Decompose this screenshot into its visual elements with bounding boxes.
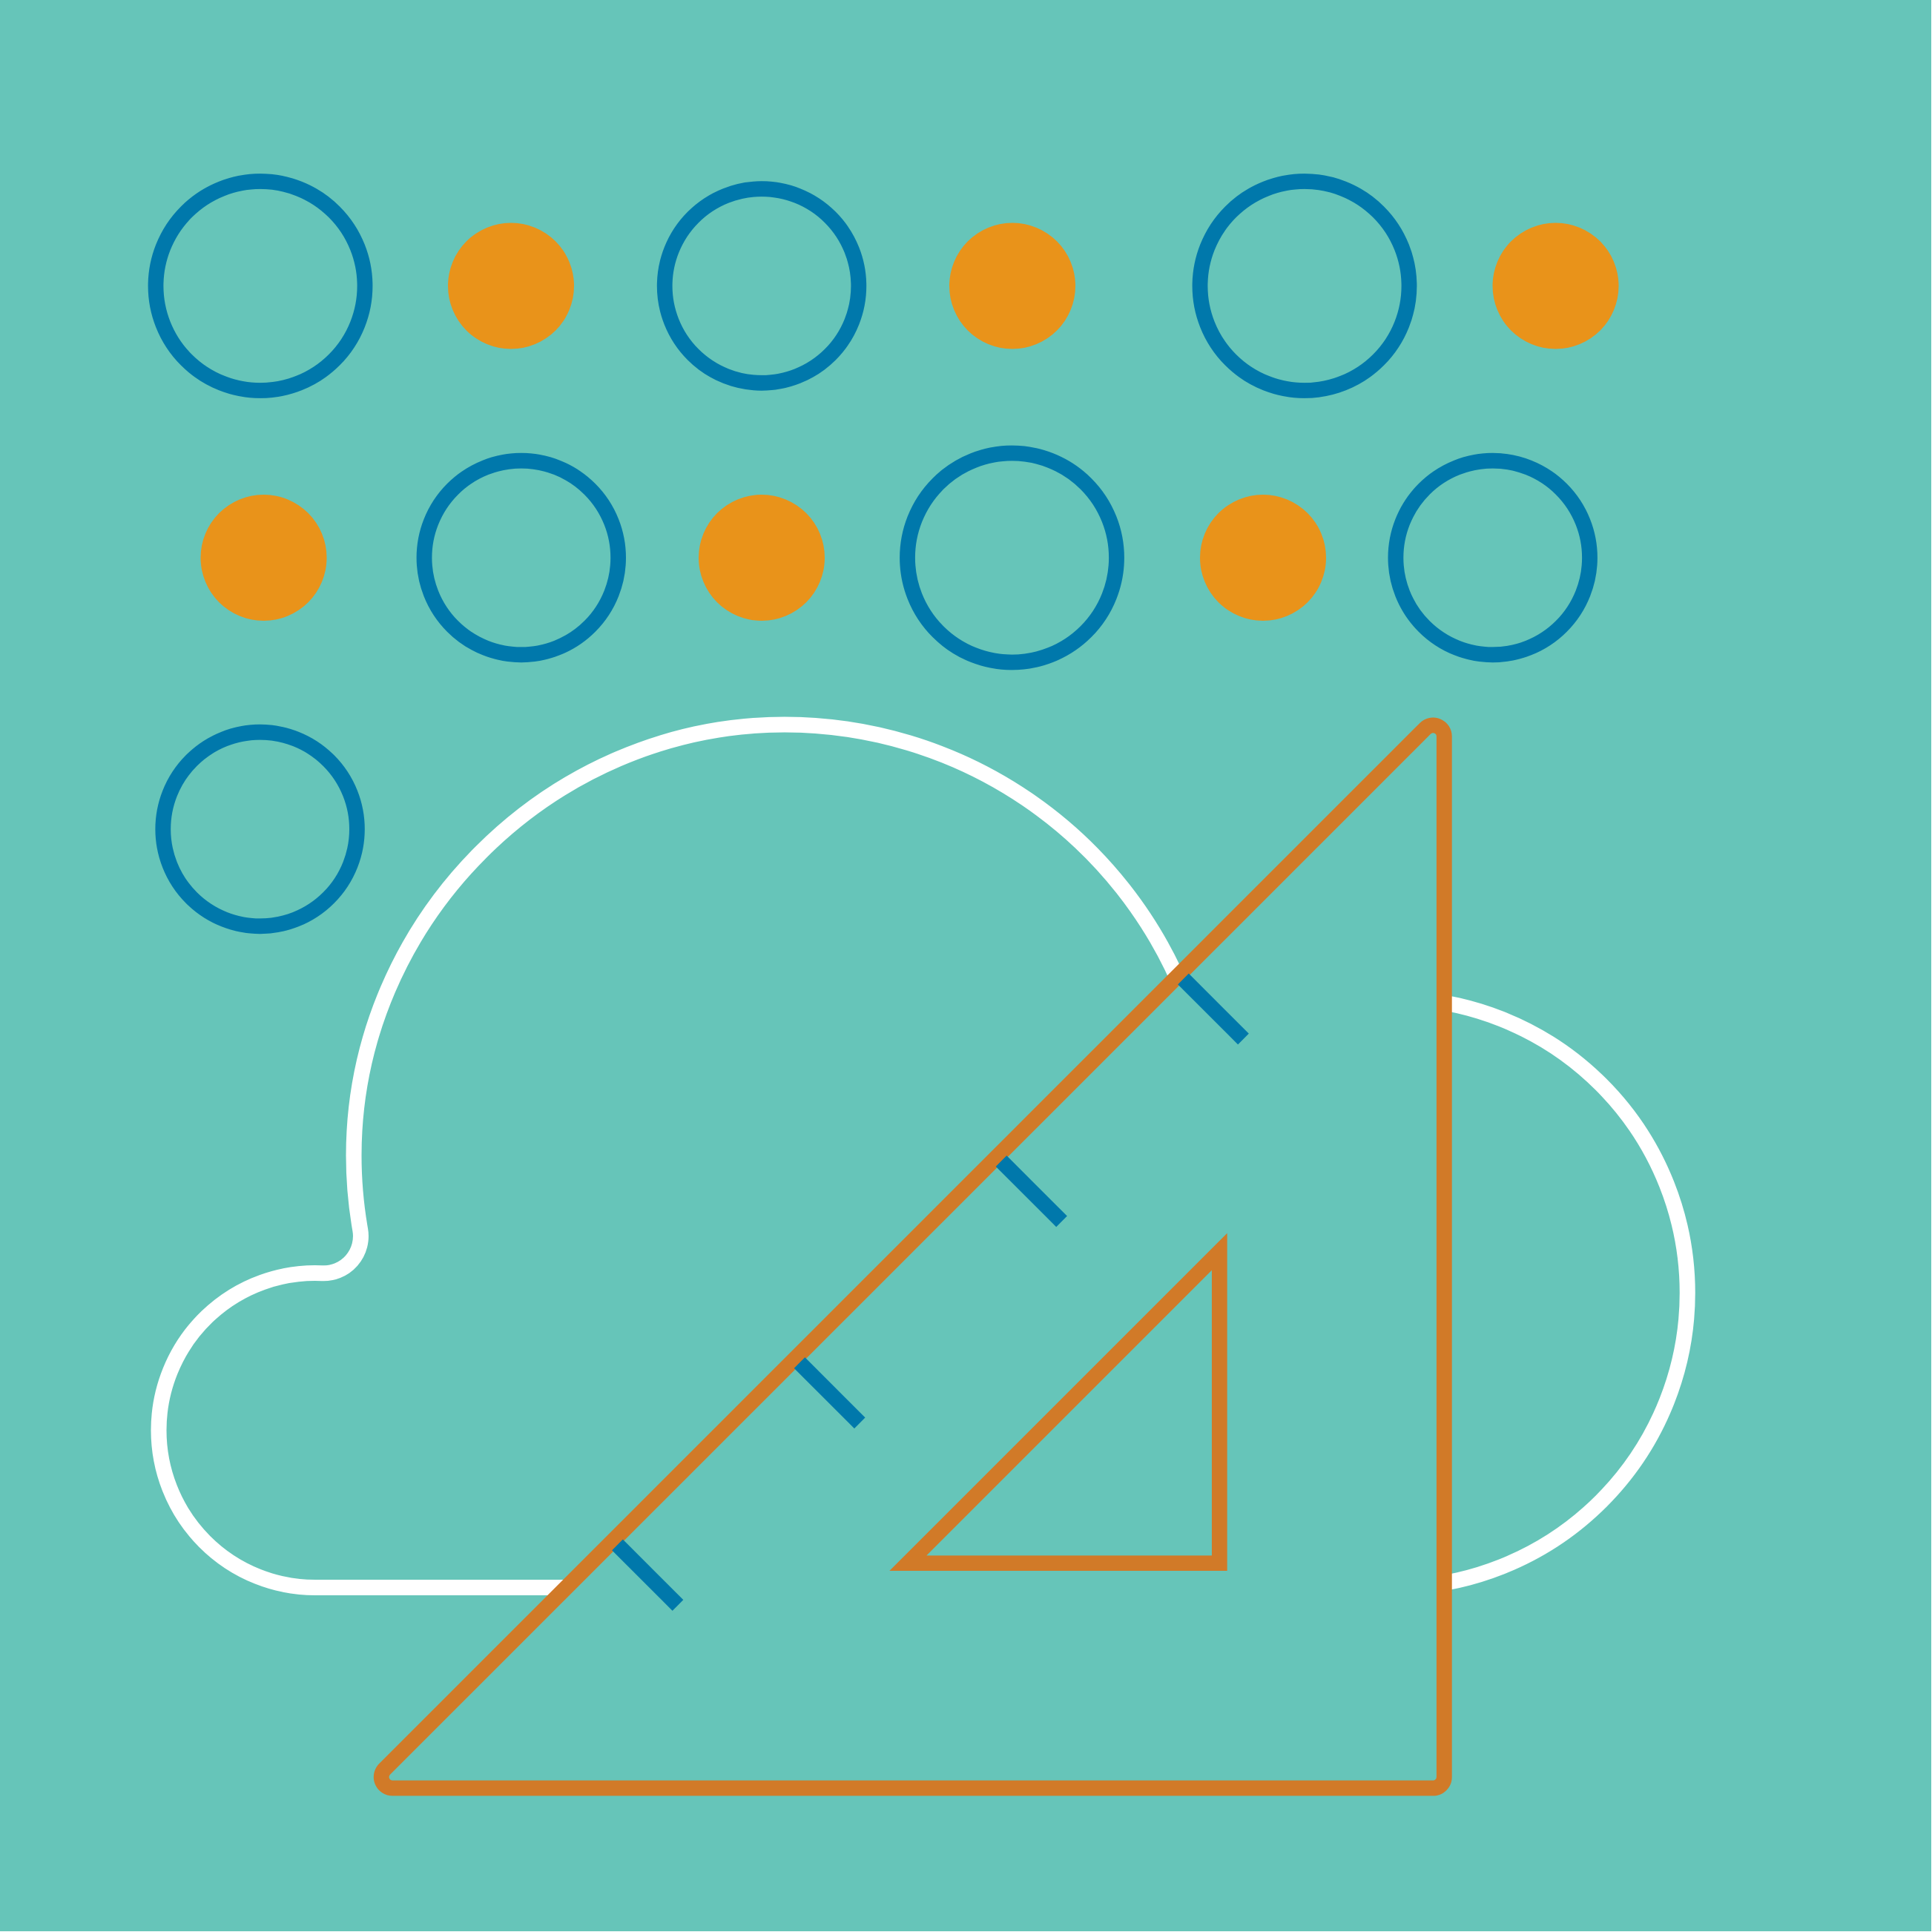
ruler tick 3 <box>799 1363 860 1423</box>
set square with ruler ticks <box>381 725 1444 1788</box>
row 2 orange dot <box>200 495 326 621</box>
set square outline <box>381 725 1444 1788</box>
row 1 blue ring, large <box>156 181 365 390</box>
row 1 blue ring, small <box>665 189 859 383</box>
row 1 blue ring, large <box>1200 181 1409 390</box>
ruler tick 4 <box>617 1545 678 1605</box>
ruler tick 1 <box>1184 979 1243 1039</box>
set square inner triangle cut-out <box>908 1252 1219 1563</box>
row 1 orange dot <box>1492 222 1618 349</box>
white cloud outline <box>159 725 1687 1587</box>
row 2 blue ring, small <box>1396 461 1590 655</box>
row 1 orange dot <box>949 222 1075 349</box>
row 2 orange dot <box>1200 495 1326 621</box>
row 2 blue ring, small <box>424 461 619 655</box>
ruler tick 2 <box>1001 1161 1062 1221</box>
set square body fill <box>381 725 1444 1788</box>
row 1 orange dot <box>448 222 574 349</box>
dot pattern: blue rings and orange dots <box>156 181 1618 926</box>
row 2 blue ring, large <box>908 453 1117 662</box>
row 3 blue ring, small <box>163 732 357 926</box>
row 2 orange dot <box>699 495 825 621</box>
